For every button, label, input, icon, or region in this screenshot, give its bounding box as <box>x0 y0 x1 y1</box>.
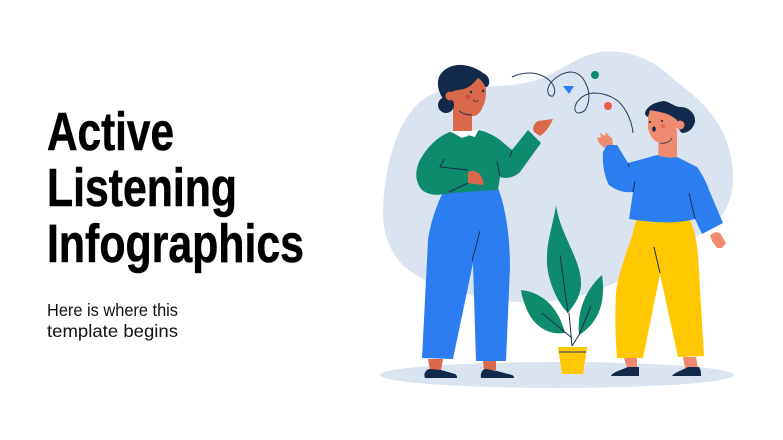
facial features <box>652 126 656 132</box>
facial features <box>459 100 478 115</box>
person left <box>416 65 553 378</box>
title: Listening <box>47 158 237 218</box>
hand on waist <box>468 171 483 185</box>
ankles <box>624 357 698 368</box>
sweater <box>416 130 541 195</box>
blue sweater <box>603 145 723 234</box>
subtitle <box>47 300 178 341</box>
title: Infographics <box>47 214 304 274</box>
ear <box>446 92 454 100</box>
plant pot <box>558 347 587 374</box>
face <box>450 78 486 116</box>
hands <box>597 132 726 248</box>
face <box>648 108 677 143</box>
neck <box>658 130 677 158</box>
plant <box>521 205 603 374</box>
background blob <box>383 51 733 302</box>
ear <box>676 120 684 130</box>
person right <box>597 101 726 376</box>
hair <box>438 65 489 100</box>
hair <box>645 101 695 133</box>
title: Active <box>47 102 174 162</box>
collar <box>450 129 479 138</box>
shoes <box>424 369 514 378</box>
title <box>47 102 304 274</box>
ankles <box>428 359 496 370</box>
ground shadow <box>380 362 734 388</box>
shoes <box>611 367 701 376</box>
trousers <box>422 188 510 361</box>
subtitle: Here is where this <box>47 300 178 320</box>
squiggle and confetti <box>512 71 633 133</box>
subtitle: template begins <box>47 321 178 341</box>
neck <box>453 108 472 132</box>
arm hand <box>533 119 553 136</box>
yellow trousers <box>615 220 704 358</box>
crossed arm lines <box>440 150 512 192</box>
